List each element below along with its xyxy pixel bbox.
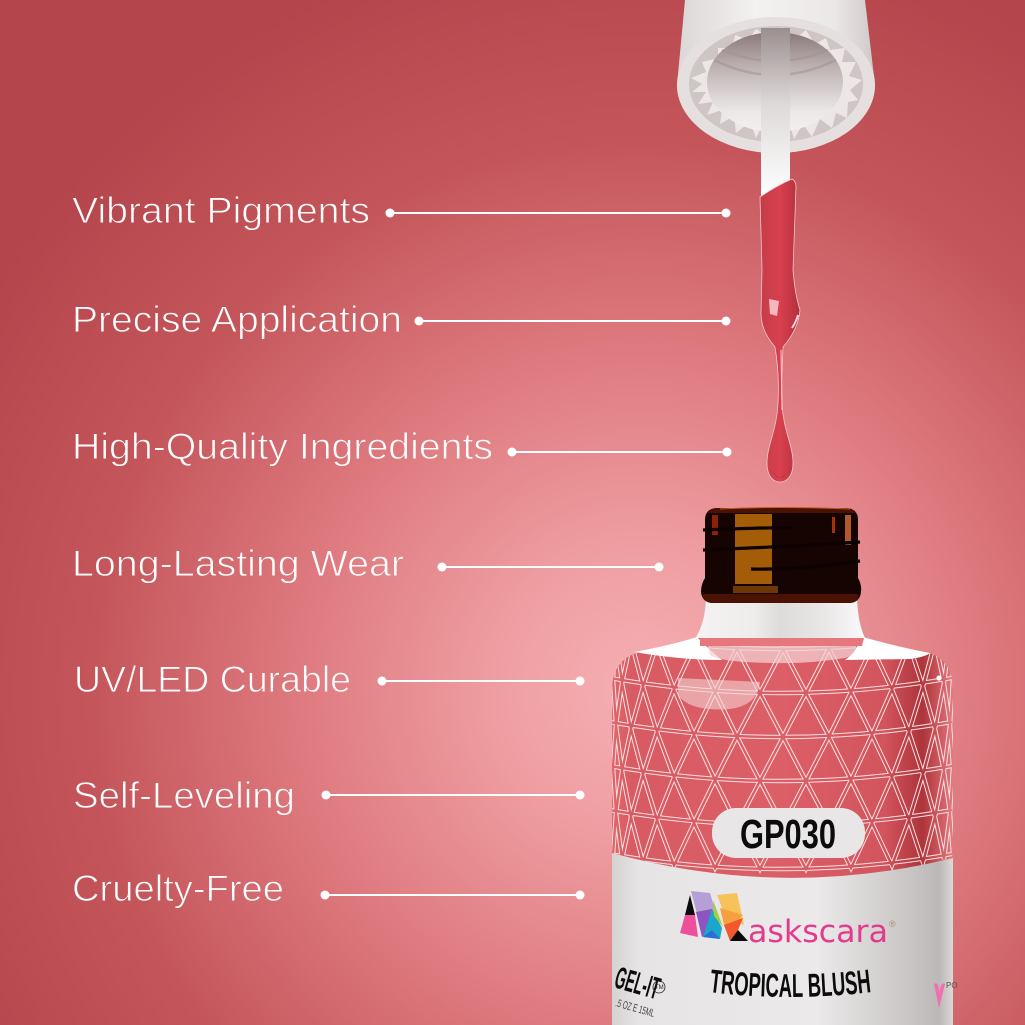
- callout: Self-Leveling: Self-Leveling: [73, 775, 295, 816]
- amber glass thread: [701, 508, 861, 603]
- gel-it mark: TM: [655, 985, 664, 991]
- callout: Self-Leveling: [73, 775, 584, 816]
- callout: Precise Application: Precise Application: [72, 299, 402, 340]
- brand logo: ®: [889, 919, 896, 929]
- shade code: GP030: [740, 811, 836, 857]
- icon: vegan heart mark: PO: [946, 981, 958, 990]
- callout: Cruelty-Free: Cruelty-Free: [72, 868, 284, 909]
- callout: High-Quality Ingredients: [72, 426, 732, 467]
- callout: Vibrant Pigments: [72, 190, 730, 231]
- product name: TROPICAL BLUSH: [711, 970, 870, 997]
- gel-it mark: GEL-IT: [611, 960, 664, 1006]
- icon: polish drip on brush: [760, 179, 800, 482]
- white label area: [612, 853, 953, 1025]
- icon: vegan heart mark: [934, 981, 958, 1008]
- bottle neck: [694, 598, 866, 640]
- triangle pattern: [610, 634, 953, 869]
- pink printed body: [612, 638, 953, 900]
- callout: High-Quality Ingredients: High-Quality Ingredients: [72, 426, 493, 467]
- icon: bottle: [611, 507, 958, 1025]
- callout: Cruelty-Free: [72, 868, 584, 909]
- callout: UV/LED Curable: UV/LED Curable: [74, 659, 351, 700]
- callout: Long-Lasting Wear: Long-Lasting Wear: [72, 543, 404, 584]
- callout: Long-Lasting Wear: [72, 543, 664, 584]
- gel-it mark: [611, 960, 665, 1020]
- brand name: askscara: [748, 914, 888, 950]
- brand logo: [680, 891, 896, 950]
- callout: UV/LED Curable: [74, 659, 584, 700]
- shade code pill: [712, 808, 865, 858]
- callout: Precise Application: [72, 299, 730, 340]
- callout: Vibrant Pigments: Vibrant Pigments: [72, 190, 370, 231]
- shoulder highlights: [634, 637, 722, 660]
- icon: brush cap: [677, 0, 875, 198]
